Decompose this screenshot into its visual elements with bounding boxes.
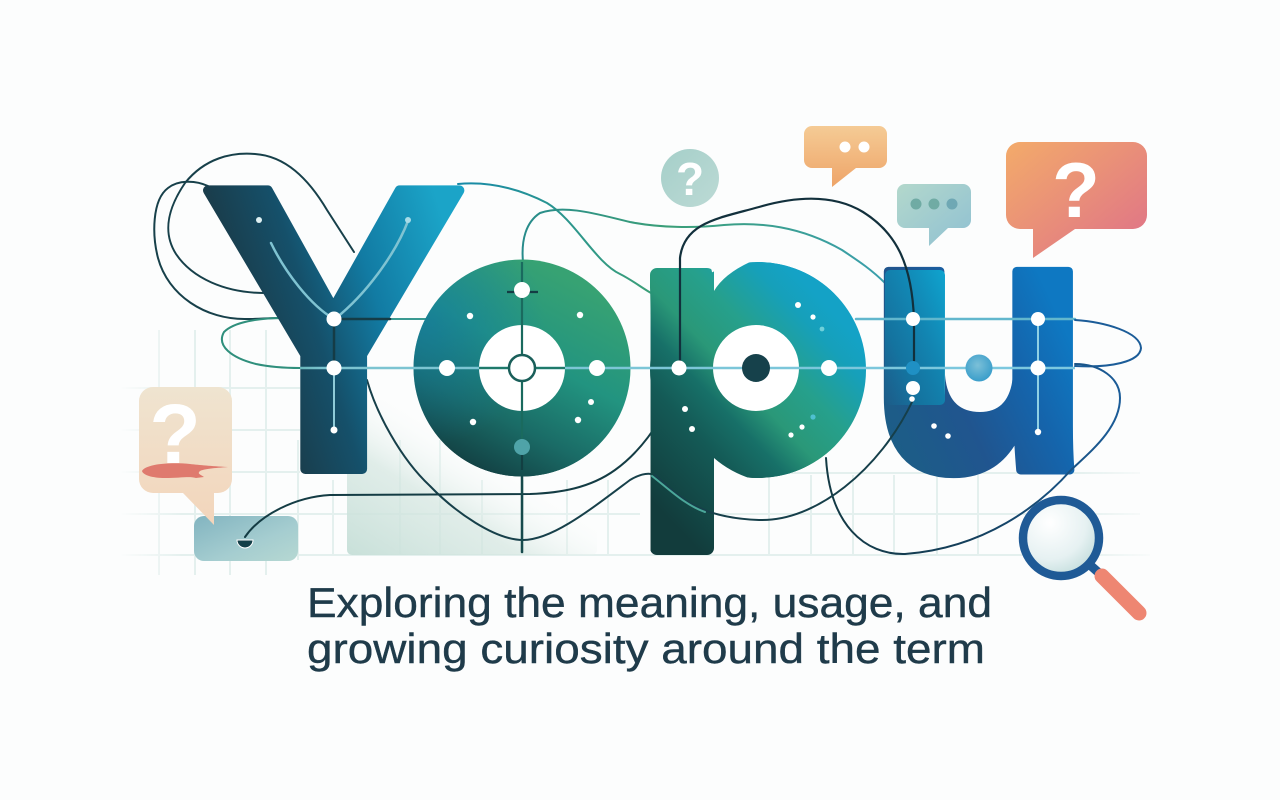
speech bubble: large question (1006, 142, 1147, 258)
letter o: o (409, 138, 635, 551)
speech bubble: cream question: ? (149, 387, 201, 481)
p circuit details (672, 302, 837, 438)
icon: magnifying glass (1023, 500, 1139, 613)
subtitle: Exploring the meaning, usage, and (307, 579, 992, 626)
subtitle: growing curiosity around the term (307, 625, 985, 672)
speech bubble: green dots (897, 184, 971, 246)
letter p (650, 262, 866, 555)
o circuit details (439, 262, 605, 470)
icon: circle question badge: ? (676, 153, 704, 205)
Y nodes (326, 312, 342, 376)
horizontal axis line (300, 367, 1075, 369)
background grid (120, 330, 1150, 575)
letter u: u (865, 130, 1095, 550)
speech bubble: orange dots (804, 126, 887, 187)
curves over letters (652, 199, 1141, 554)
speech bubble: large question: ? (1052, 146, 1100, 234)
icon: circle question badge (661, 149, 719, 207)
letter o (414, 260, 630, 476)
letter Y: Y (201, 102, 466, 555)
speech bubble: cream question (139, 387, 232, 525)
subtitle (307, 579, 992, 672)
Y circuit lines and nodes (256, 217, 411, 434)
pale green panel (347, 400, 597, 555)
letter p: p (630, 128, 862, 555)
connecting curves behind letters (154, 154, 886, 552)
u circuit details (906, 312, 1046, 439)
small teal tag (194, 516, 298, 561)
